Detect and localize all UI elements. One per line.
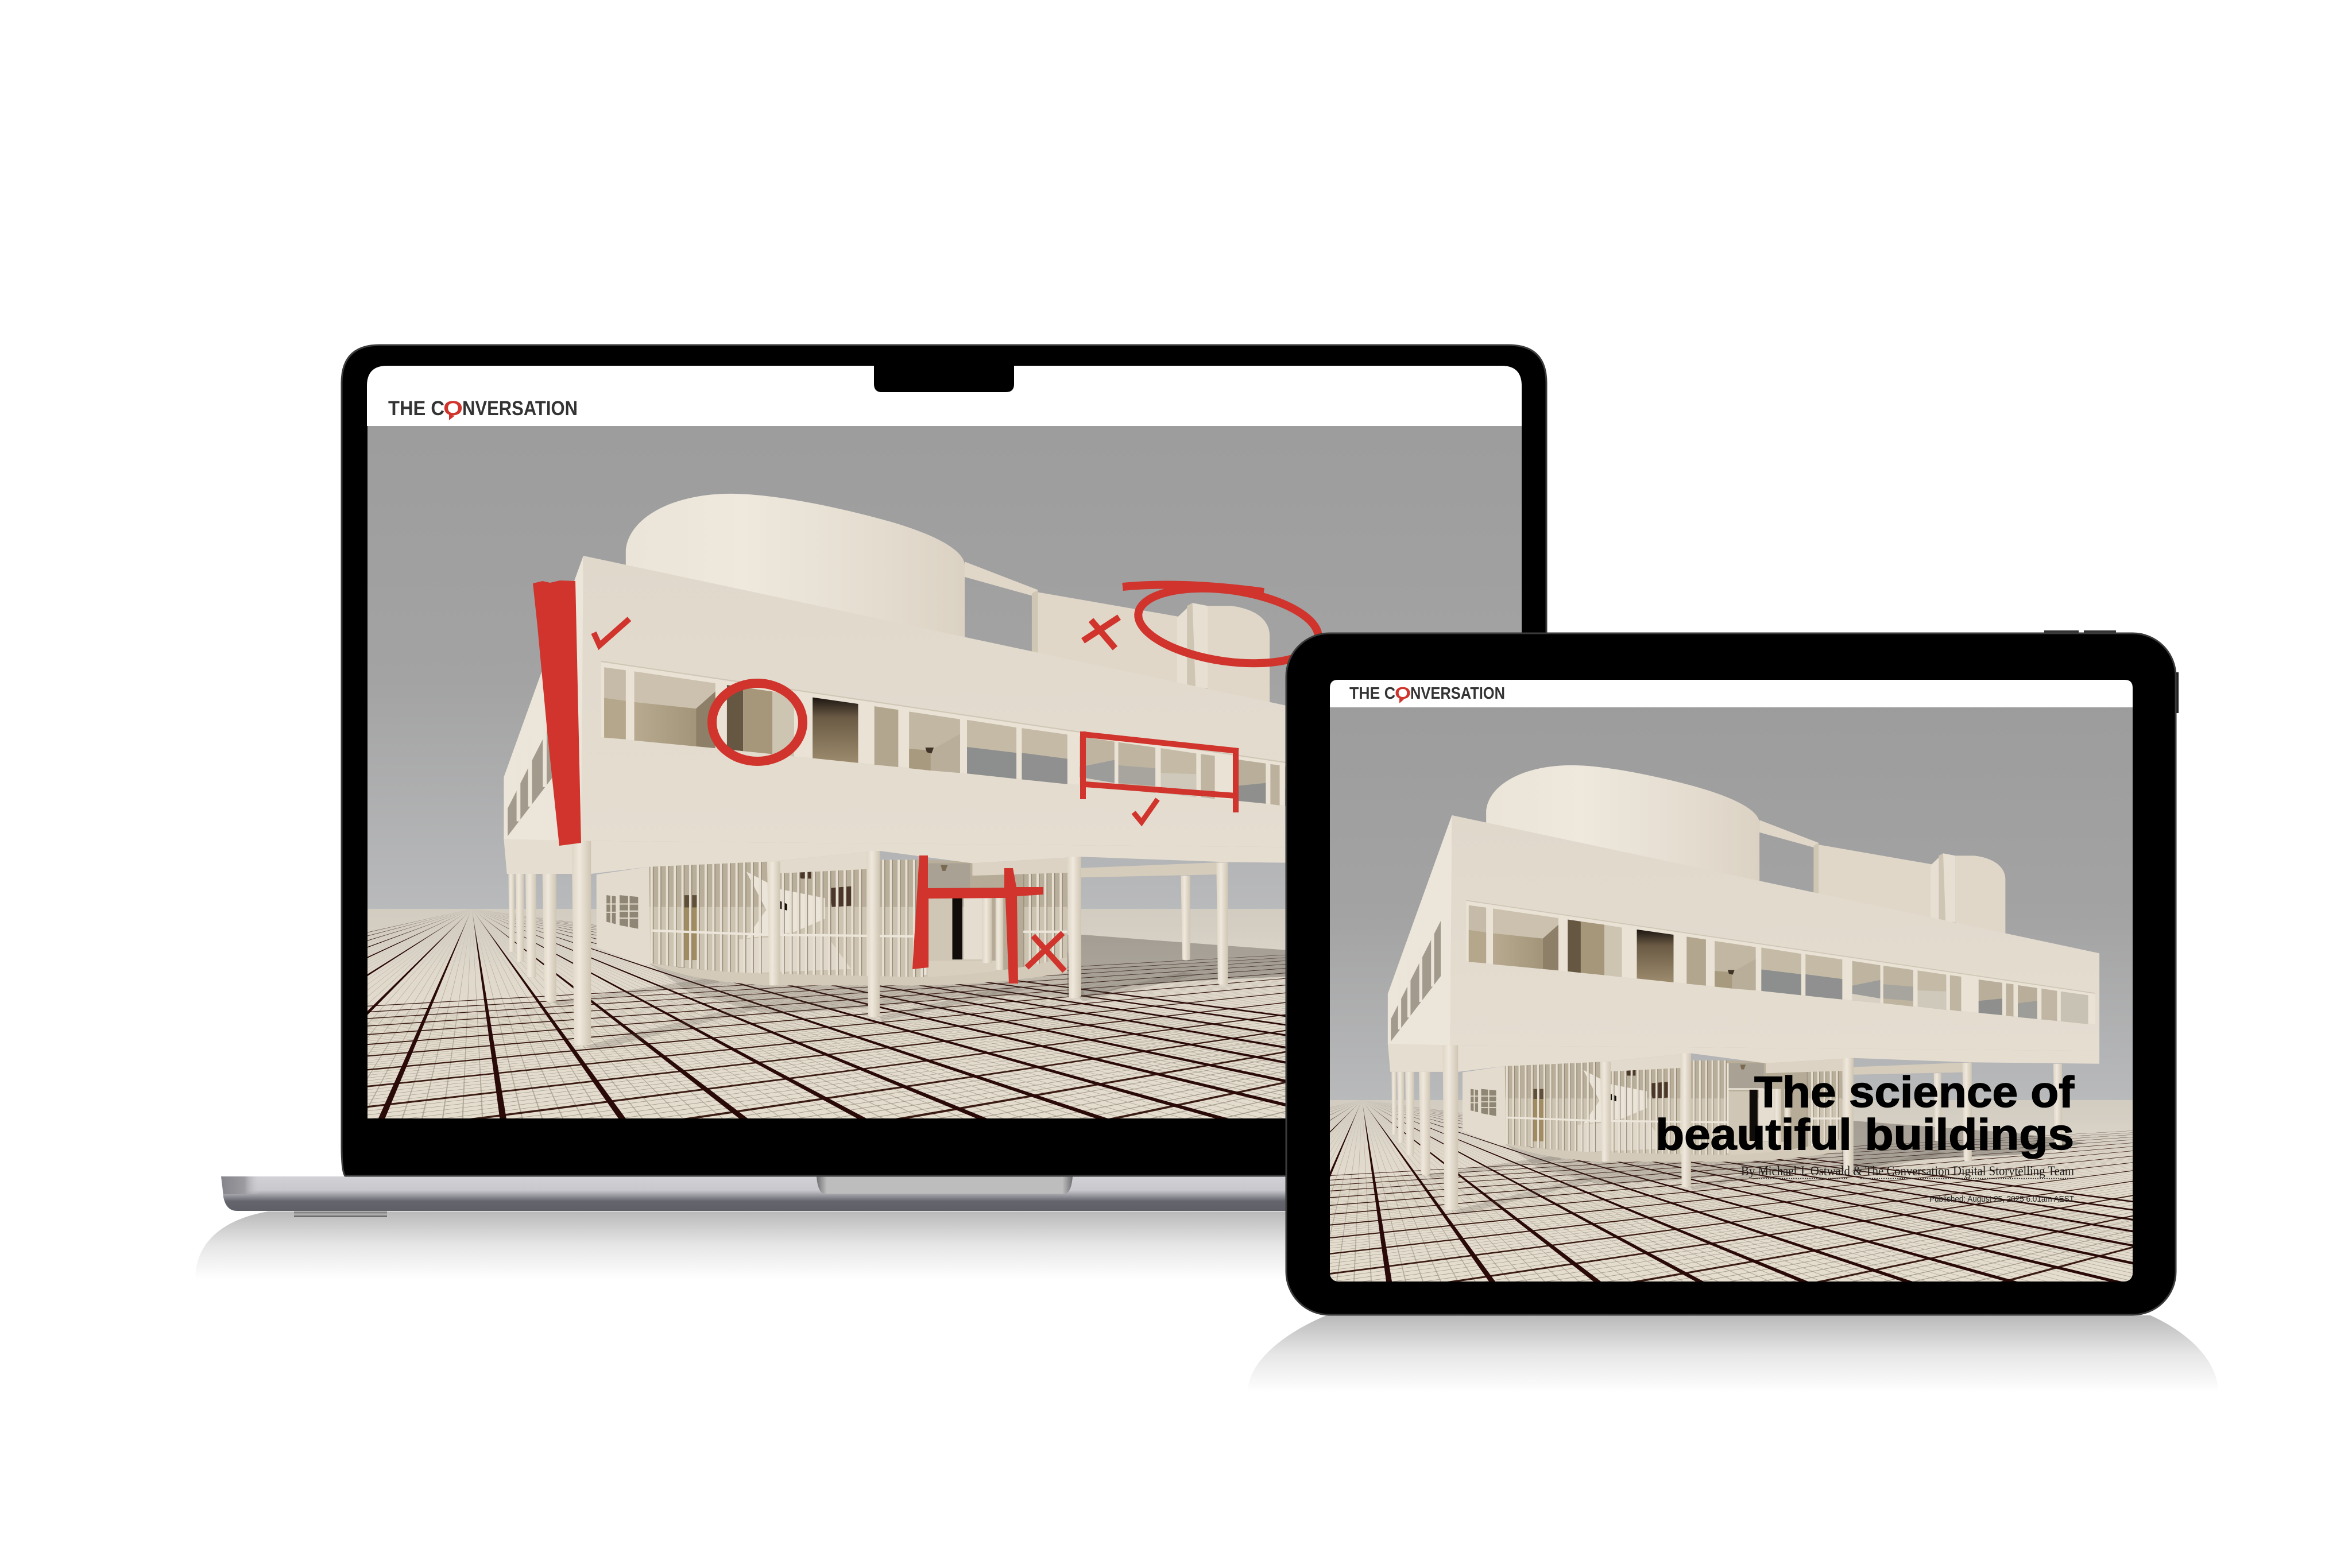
laptop logo [388, 397, 578, 420]
laptop logo: THE C [388, 397, 444, 420]
laptop logo: NVERSATION [462, 397, 578, 420]
laptop screen photo: Villa Savoye render [368, 426, 1522, 1118]
laptop logo: O [443, 397, 463, 420]
annotation: check mark on wall [594, 619, 629, 645]
annotation: thick brush stroke on corner [533, 580, 581, 846]
laptop screen header bar [367, 366, 1522, 426]
annotation: circle on window [712, 683, 803, 761]
tablet side button [2174, 672, 2179, 713]
laptop reflection shadow [195, 1211, 1378, 1279]
laptop lid bezel [342, 345, 1546, 1176]
article title [1655, 1068, 2075, 1159]
tablet logo [1349, 684, 1505, 703]
tablet screen photo: Villa Savoye render [1330, 707, 2133, 1281]
annotation: cross at entry [1027, 933, 1065, 971]
laptop device [221, 344, 1547, 1217]
tablet body bezel [1286, 633, 2176, 1315]
annotation: check below windows [1134, 799, 1158, 822]
tablet logo: THE C [1349, 684, 1395, 703]
tablet logo: O [1395, 684, 1411, 703]
tablet device [1285, 630, 2179, 1316]
tablet header bar [1330, 680, 2133, 707]
annotation: H mark at entry [912, 855, 1043, 984]
annotation: cross near tower [1083, 617, 1119, 648]
byline: By Michael J. Ostwald & The Conversation Digital Storytelling Team [1741, 1164, 2074, 1178]
tablet reflection shadow [1248, 1315, 2218, 1392]
annotation: ellipse around tower [1123, 578, 1323, 673]
tablet top buttons [2044, 630, 2116, 635]
red annotations [533, 578, 1323, 984]
tablet logo: NVERSATION [1410, 684, 1505, 703]
article title: beautiful buildings [1655, 1110, 2074, 1159]
article title: The science of [1754, 1068, 2075, 1117]
annotation: rectangle on windows [1083, 731, 1239, 812]
laptop camera notch [874, 362, 1014, 392]
laptop base [221, 1176, 1665, 1217]
publication date: Published: August 25, 2025 6.01am AEST [1929, 1195, 2074, 1204]
